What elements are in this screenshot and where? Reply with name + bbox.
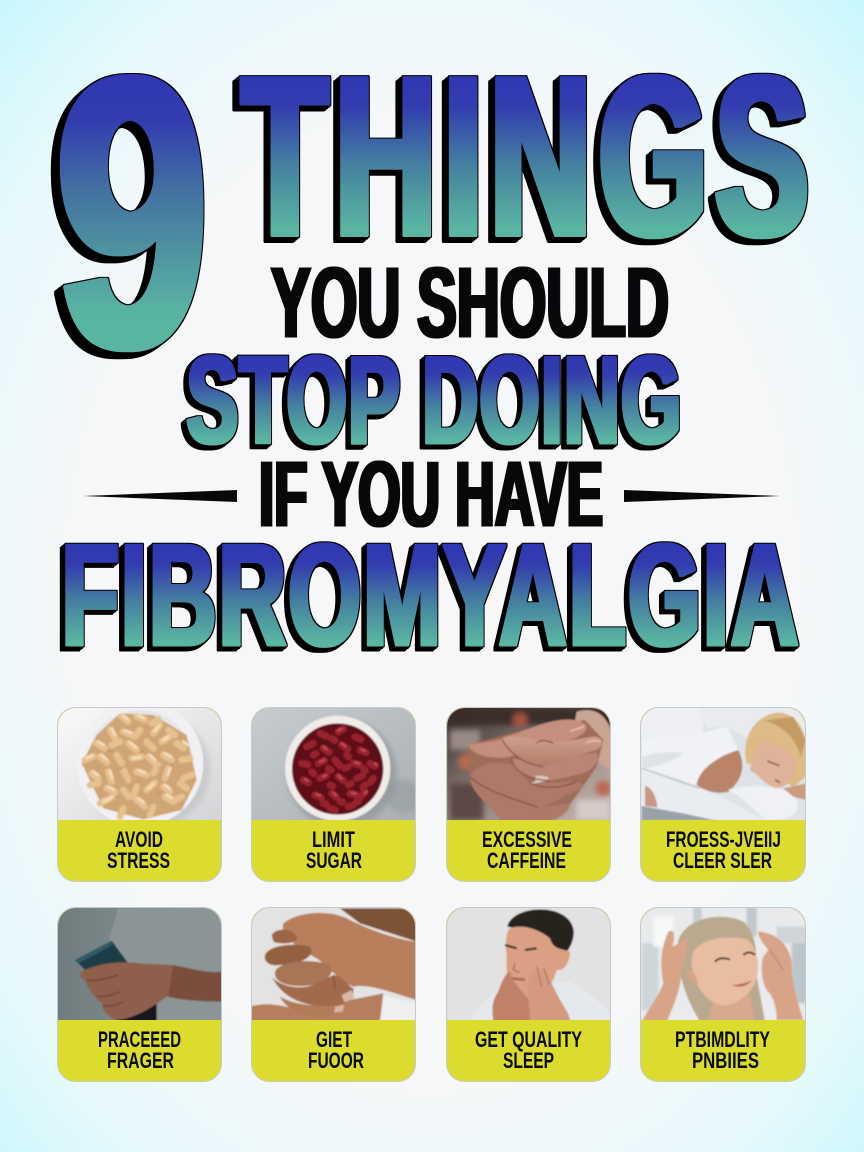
- label: PTBIMDLITY: [675, 1027, 770, 1052]
- title: number 9: 9: [55, 0, 209, 428]
- label: [306, 827, 362, 873]
- photo: woman touching her head: [640, 907, 807, 1022]
- card: limit sugar: [250, 707, 420, 882]
- label: FRAGER: [107, 1048, 174, 1073]
- card: get quality sleep: [446, 907, 612, 1082]
- label: [482, 827, 572, 873]
- card: praceeed frager: [57, 907, 223, 1082]
- card: avoid stress: [57, 700, 223, 882]
- label: PNBIIES: [692, 1048, 759, 1073]
- label: FROESS-JVEIIJ: [666, 827, 781, 852]
- label: CAFFEINE: [487, 848, 566, 873]
- label: STRESS: [107, 848, 170, 873]
- label: [675, 1027, 770, 1073]
- label: FUOOR: [308, 1048, 364, 1073]
- label: GET QUALITY: [475, 1027, 582, 1052]
- photo: clasped aching hands: [447, 707, 613, 822]
- photo: gripping hands: [250, 907, 418, 1022]
- label: [98, 1027, 181, 1073]
- photo: plate of food: [58, 708, 221, 820]
- photo: hand holding phone: [57, 907, 223, 1022]
- label: AVOID: [115, 827, 163, 852]
- label: EXCESSIVE: [482, 827, 572, 852]
- title: IF YOU HAVE: IF YOU HAVE: [259, 442, 603, 546]
- label: [107, 827, 170, 873]
- photo: woman lying on pillow: [640, 707, 807, 822]
- decorative rule right: [624, 490, 780, 502]
- label: [475, 1027, 582, 1073]
- card: giet fuoor: [250, 907, 418, 1082]
- photo: man holding his face: [447, 907, 612, 1022]
- label: SLEEP: [503, 1048, 554, 1073]
- card: froess-jveiij cleer sler: [640, 707, 807, 882]
- label: PRACEEED: [98, 1027, 181, 1052]
- card: ptbimdlity pnbiies: [640, 907, 807, 1082]
- label: CLEER SLER: [673, 848, 772, 873]
- label: GIET: [316, 1027, 352, 1052]
- label: [666, 827, 781, 873]
- photo: bowl of red berries: [252, 708, 415, 820]
- decorative rule left: [83, 490, 237, 502]
- label: LIMIT: [312, 827, 355, 852]
- label: [308, 1027, 364, 1073]
- label: SUGAR: [306, 848, 362, 873]
- card: excessive caffeine: [446, 707, 613, 882]
